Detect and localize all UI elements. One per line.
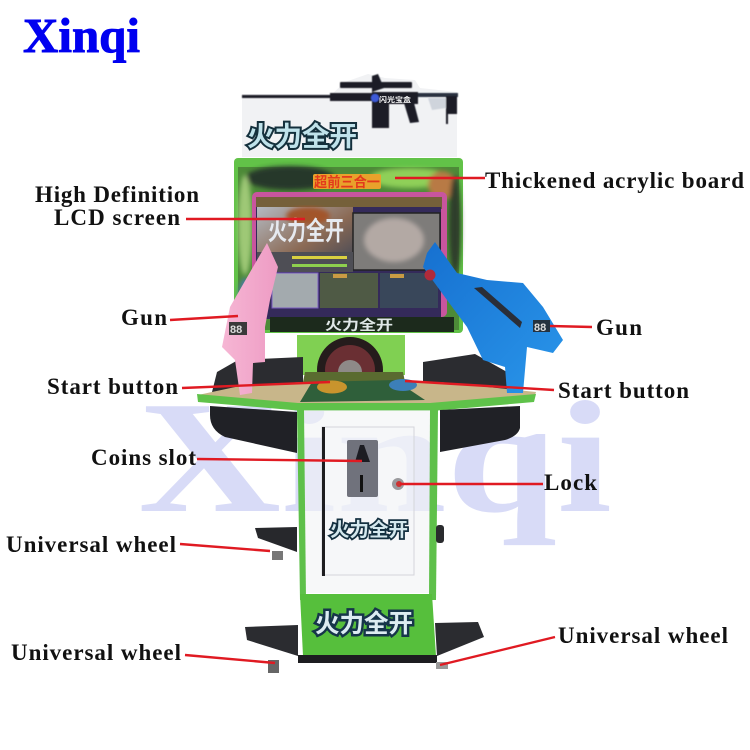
base panel	[300, 594, 436, 656]
label: Gun left: Gun	[121, 305, 167, 330]
label: High Definition LCD screen	[35, 182, 199, 230]
door logo: 火力全开	[330, 515, 408, 542]
arcade machine illustration	[197, 74, 563, 673]
blue gun	[423, 242, 563, 393]
watermark: Xinqi: Xinqi	[138, 368, 612, 546]
label: Start button left: Start button	[47, 374, 178, 399]
pink gun	[222, 243, 278, 395]
base panel: 火力全开	[315, 604, 413, 640]
marquee top board	[242, 74, 458, 157]
label: Universal wheel bottom right: Universal wheel	[558, 623, 728, 648]
rifle badge text: 闪光宝盒	[379, 95, 411, 105]
gun holsters	[212, 354, 520, 392]
label: High Definition LCD screen: High Definition	[35, 182, 199, 207]
label: Start button right: Start button	[558, 378, 689, 403]
icon: sniper rifle	[242, 74, 458, 128]
label: Lock: Lock	[544, 470, 597, 495]
LCD screen: 火力全开	[268, 211, 344, 248]
cabinet body	[297, 410, 438, 600]
blue gun: 88	[534, 322, 546, 334]
green screen surround	[234, 158, 463, 333]
acrylic board title	[313, 174, 381, 189]
pink gun: 88	[230, 324, 242, 336]
label: High Definition LCD screen: LCD screen	[54, 205, 180, 230]
base feet	[245, 622, 484, 673]
lock	[392, 478, 404, 490]
label: Coins slot: Coins slot	[91, 445, 196, 470]
cabinet door	[322, 427, 414, 576]
marquee logo: 火力全开	[247, 115, 357, 154]
mid foot left	[255, 527, 297, 560]
label: Universal wheel bottom left: Universal wheel	[11, 640, 181, 665]
label: Gun right: Gun	[596, 315, 642, 340]
brand title: Xinqi: Xinqi	[23, 8, 140, 63]
callout lines	[170, 178, 592, 665]
speaker panel	[297, 335, 405, 403]
label: Universal wheel middle: Universal wheel	[6, 532, 176, 557]
side body wings	[210, 406, 520, 453]
lower screen logo strip: 火力全开	[325, 315, 393, 335]
start button left	[317, 380, 347, 394]
lower screen logo strip	[270, 315, 454, 335]
control deck	[197, 372, 536, 411]
coin slot	[347, 440, 378, 497]
LCD screen	[252, 192, 447, 319]
acrylic board title text: 超前三合一	[314, 172, 380, 192]
start button right	[389, 379, 417, 391]
mid foot right	[436, 525, 444, 543]
label: Thickened acrylic board: Thickened acrylic board	[485, 168, 744, 193]
